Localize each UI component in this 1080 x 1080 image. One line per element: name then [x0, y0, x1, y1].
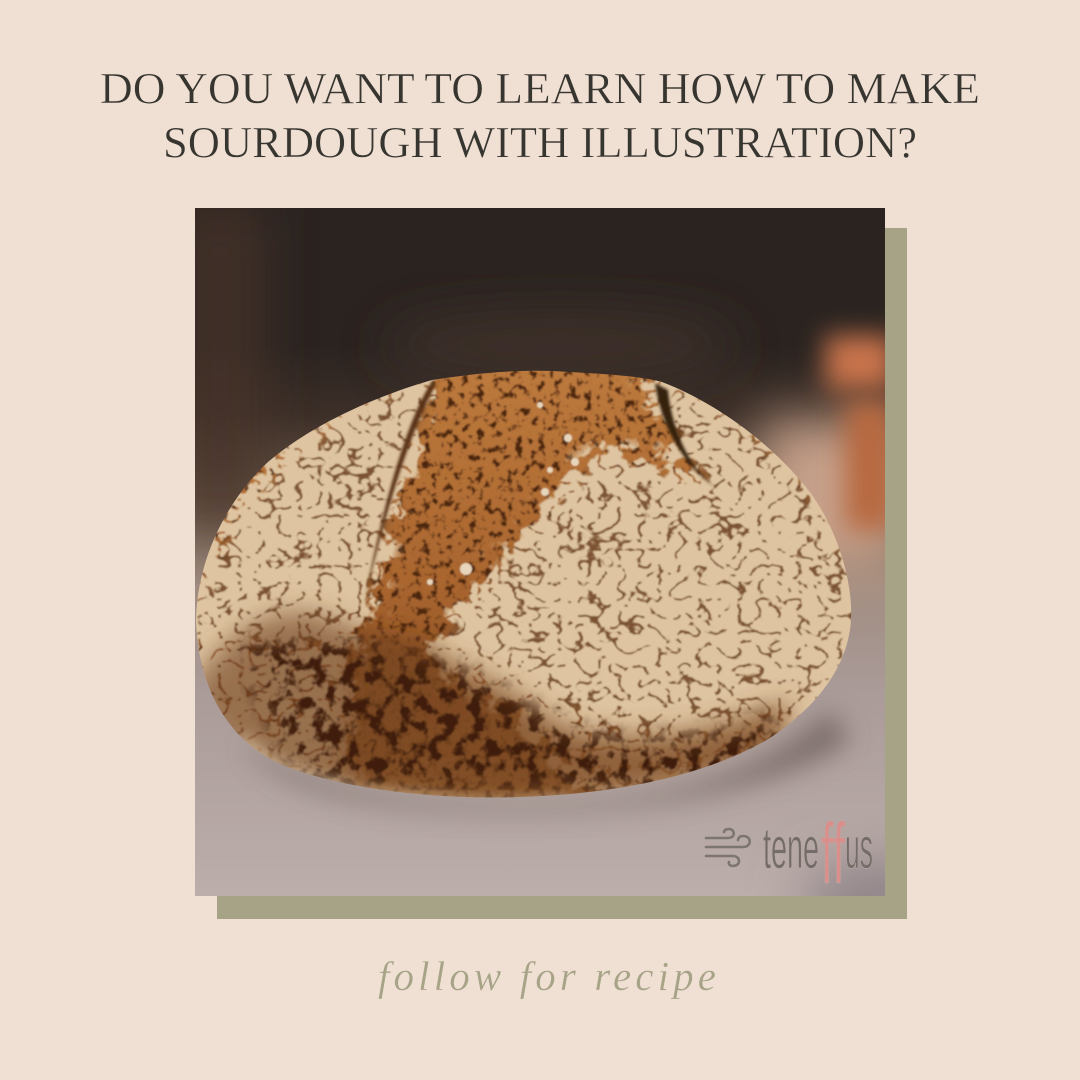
dark crack bed under left flour: [190, 380, 433, 640]
title: DO YOU WANT TO LEARN HOW TO MAKE: [100, 64, 980, 113]
icon: wind: [706, 829, 750, 866]
tagline: follow for recipe: [378, 953, 716, 999]
offset shadow panel: [217, 228, 907, 919]
burn: dark mottling: [240, 636, 780, 790]
wordmark: [763, 806, 873, 902]
photo: sourdough loaf: [195, 208, 885, 896]
crust base: [190, 365, 860, 805]
crust dark mottling: [190, 365, 860, 805]
specks of flour: [427, 402, 579, 585]
text: us: [845, 816, 873, 881]
title: SOURDOUGH WITH ILLUSTRATION?: [163, 118, 917, 167]
loaf contact shadow: [240, 710, 850, 812]
burn: lower-centre: [340, 640, 790, 800]
loaf: [196, 370, 852, 798]
score cuts: [365, 380, 436, 598]
photo backdrop: [195, 208, 885, 896]
dark crack bed under right flour: [445, 385, 860, 732]
burn: lower-left: [185, 612, 440, 810]
flour: left shoulder: [196, 379, 438, 782]
wordmark: tene: [763, 816, 819, 881]
wordmark: ff: [821, 806, 846, 902]
title: [100, 64, 980, 167]
flour: right dome: [425, 365, 880, 790]
logo: teneffus: [706, 806, 873, 902]
flour: bottom rim dust: [237, 728, 574, 798]
